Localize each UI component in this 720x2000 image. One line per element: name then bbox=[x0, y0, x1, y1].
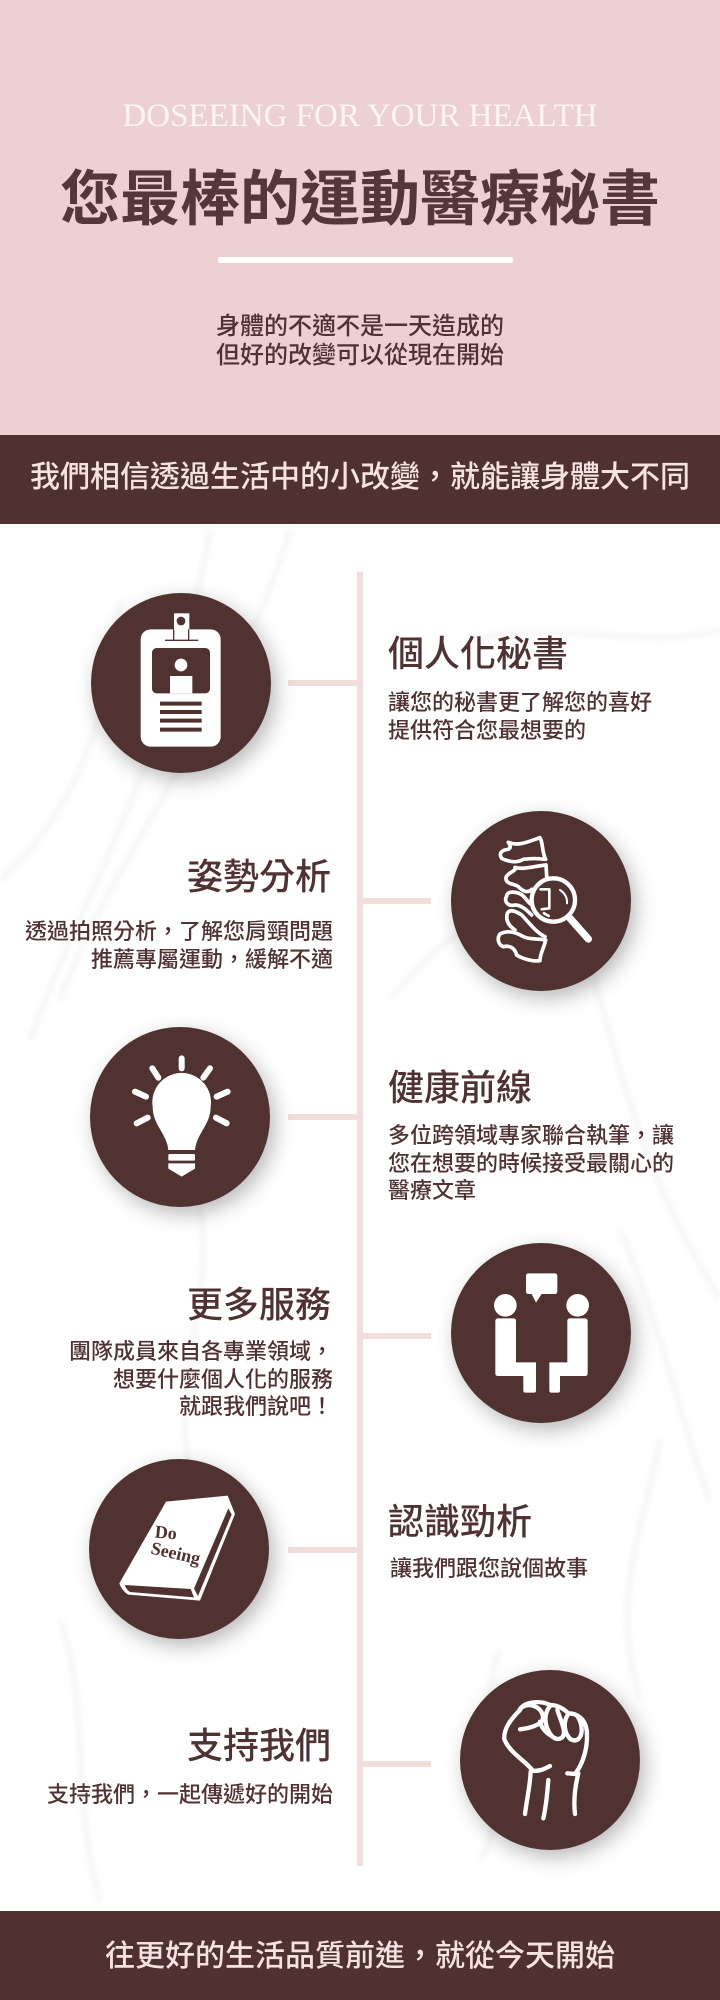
text: posture analysis: 推薦專屬運動，緩解不適 bbox=[91, 946, 333, 972]
icon: book: Seeing bbox=[149, 1538, 202, 1568]
icon: two people talking bbox=[494, 1273, 589, 1393]
heading: support us: 支持我們 bbox=[187, 1725, 331, 1766]
icon: raised fist bbox=[502, 1700, 590, 1820]
banner: belief statement bbox=[0, 435, 720, 524]
banner: belief statement: 我們相信透過生活中的小改變，就能讓身體大不同 bbox=[30, 461, 690, 494]
banner: closing statement bbox=[0, 1911, 720, 2000]
text: more services: 想要什麼個人化的服務 bbox=[113, 1366, 333, 1392]
banner: closing statement: 往更好的生活品質前進，就從今天開始 bbox=[105, 1940, 615, 1973]
heading: more services: 更多服務 bbox=[187, 1284, 331, 1325]
text: health front line: 醫療文章 bbox=[388, 1178, 476, 1203]
subtitle: 身體的不適不是一天造成的 bbox=[216, 313, 504, 340]
circle: conversation bbox=[451, 1243, 631, 1423]
circle: fist bbox=[460, 1670, 640, 1850]
circle: book bbox=[89, 1459, 269, 1639]
heading: health front line: 健康前線 bbox=[388, 1067, 532, 1108]
subtitle bbox=[216, 313, 504, 369]
text: personal secretary bbox=[388, 690, 652, 742]
text: health front line bbox=[388, 1123, 674, 1203]
icon: book bbox=[119, 1496, 235, 1601]
heading: posture analysis: 姿勢分析 bbox=[187, 856, 331, 897]
text: more services bbox=[69, 1339, 333, 1419]
text: personal secretary: 提供符合您最想要的 bbox=[388, 718, 586, 742]
timeline bbox=[288, 572, 431, 1866]
icon: light bulb bbox=[132, 1055, 231, 1177]
heading: about doseeing: 認識勁析 bbox=[388, 1501, 532, 1542]
title: 您最棒的運動醫療秘書 bbox=[60, 166, 660, 233]
text: personal secretary: 讓您的秘書更了解您的喜好 bbox=[388, 690, 652, 715]
text: posture analysis: 透過拍照分析，了解您肩頸問題 bbox=[25, 919, 333, 944]
text: support us: 支持我們，一起傳遞好的開始 bbox=[47, 1782, 333, 1807]
text: more services: 就跟我們說吧！ bbox=[179, 1394, 333, 1419]
divider bbox=[218, 257, 513, 263]
icon: id badge bbox=[140, 613, 221, 747]
text: health front line: 多位跨領域專家聯合執筆，讓 bbox=[388, 1123, 674, 1148]
text: health front line: 您在想要的時候接受最關心的 bbox=[388, 1150, 674, 1176]
background marble texture bbox=[0, 524, 720, 1912]
heading: personal secretary: 個人化秘書 bbox=[388, 633, 568, 674]
text: about doseeing: 讓我們跟您說個故事 bbox=[390, 1556, 588, 1581]
text: more services: 團隊成員來自各專業領域， bbox=[69, 1339, 333, 1364]
panel: header bbox=[0, 0, 720, 435]
tagline: DOSEEING FOR YOUR HEALTH bbox=[122, 98, 598, 134]
icon: spine and magnifier bbox=[496, 836, 592, 963]
circle: id badge bbox=[91, 593, 271, 773]
circle: spine bbox=[451, 811, 631, 991]
subtitle: 但好的改變可以從現在開始 bbox=[216, 342, 504, 369]
circle: light bulb bbox=[90, 1027, 270, 1207]
text: posture analysis bbox=[25, 919, 333, 972]
icon: book: Do bbox=[154, 1521, 178, 1544]
